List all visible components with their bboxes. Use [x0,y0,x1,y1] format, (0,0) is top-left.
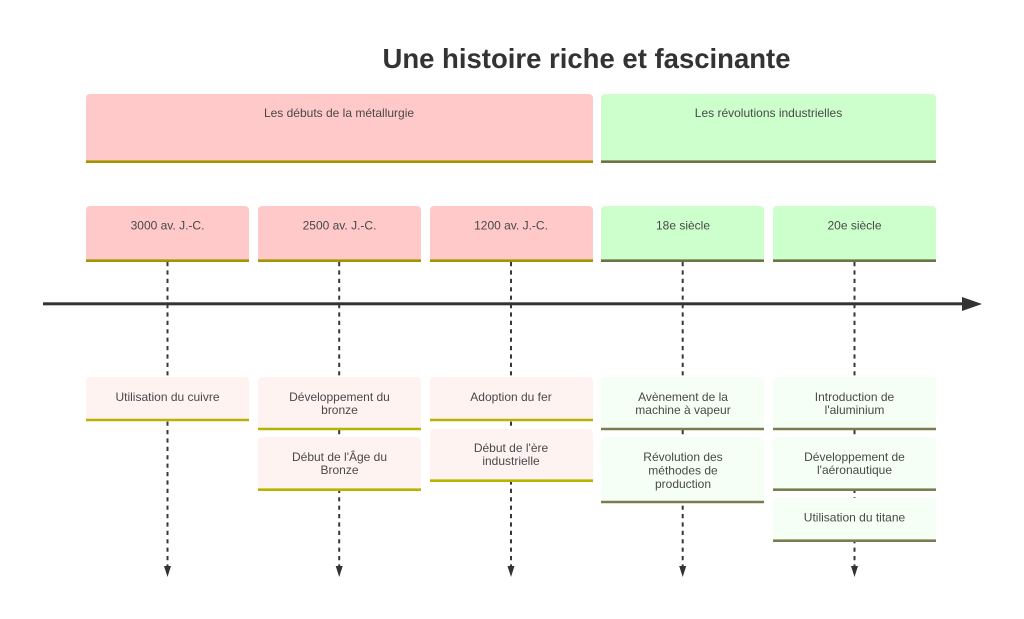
event: Adoption du fer: Adoption du fer [470,390,552,404]
event: Utilisation du cuivre: Utilisation du cuivre [115,390,220,404]
period: 18e siècle [601,206,764,262]
event: Début de l'ère industrielle [430,429,593,482]
event: Début de l'Âge du Bronze: Bronze [320,463,359,477]
event: Développement du bronze: bronze [321,403,358,417]
event: Avènement de la machine à vapeur [601,377,764,430]
event: Début de l'ère industrielle: Début de l'ère [474,441,548,455]
timeline arrow [43,297,982,311]
period: 1200 av. J.-C.: 1200 av. J.-C. [474,218,548,232]
panel: Les débuts de la métallurgie: Les débuts de la métallurgie [264,106,414,120]
dashed connector: 18e siècle [679,262,686,577]
event: Utilisation du cuivre [86,377,249,421]
event: Adoption du fer [430,377,593,421]
event: Développement du bronze: Développement du [289,390,390,404]
period: 20e siècle: 20e siècle [827,218,882,232]
panel: Les révolutions industrielles [601,94,936,163]
event: Introduction de l'aluminium: l'aluminium [825,403,884,417]
event: Début de l'Âge du Bronze [258,437,421,491]
panel: Les débuts de la métallurgie [86,94,593,163]
event: Début de l'ère industrielle: industrielle [482,454,540,468]
dashed connector: 20e siècle [851,262,858,577]
period: 1200 av. J.-C. [430,206,593,262]
period: 3000 av. J.-C.: 3000 av. J.-C. [131,218,204,232]
event: Révolution des méthodes de production [601,437,764,503]
event: Introduction de l'aluminium: Introduction de [815,390,895,404]
dashed connector: 3000 av. J.-C. [164,262,171,577]
event: Introduction de l'aluminium [773,377,936,430]
period: 2500 av. J.-C.: 2500 av. J.-C. [303,218,376,232]
period: 3000 av. J.-C. [86,206,249,262]
event: Développement de l'aéronautique: Développement de [804,450,905,464]
event: Révolution des méthodes de production: méthodes de [648,464,718,478]
period: 20e siècle [773,206,936,262]
dashed connector: 1200 av. J.-C. [508,262,514,577]
title: Une histoire riche et fascinante [382,43,791,74]
event: Avènement de la machine à vapeur: machine à vapeur [635,403,731,417]
event: Avènement de la machine à vapeur: Avènement de la [638,390,728,404]
event: Début de l'Âge du Bronze: Début de l'Âge du [292,449,387,464]
panel: Les révolutions industrielles: Les révolutions industrielles [695,106,842,120]
event: Développement du bronze [258,377,421,430]
event: Développement de l'aéronautique [773,437,936,491]
event: Utilisation du titane [773,498,936,542]
period: 2500 av. J.-C. [258,206,421,262]
event: Révolution des méthodes de production: production [655,477,711,491]
event: Utilisation du titane: Utilisation du titane [804,510,906,524]
period: 18e siècle: 18e siècle [656,218,710,232]
dashed connector: 2500 av. J.-C. [336,262,343,577]
event: Révolution des méthodes de production: Révolution des [643,450,723,464]
event: Développement de l'aéronautique: l'aéronautique [817,463,892,477]
